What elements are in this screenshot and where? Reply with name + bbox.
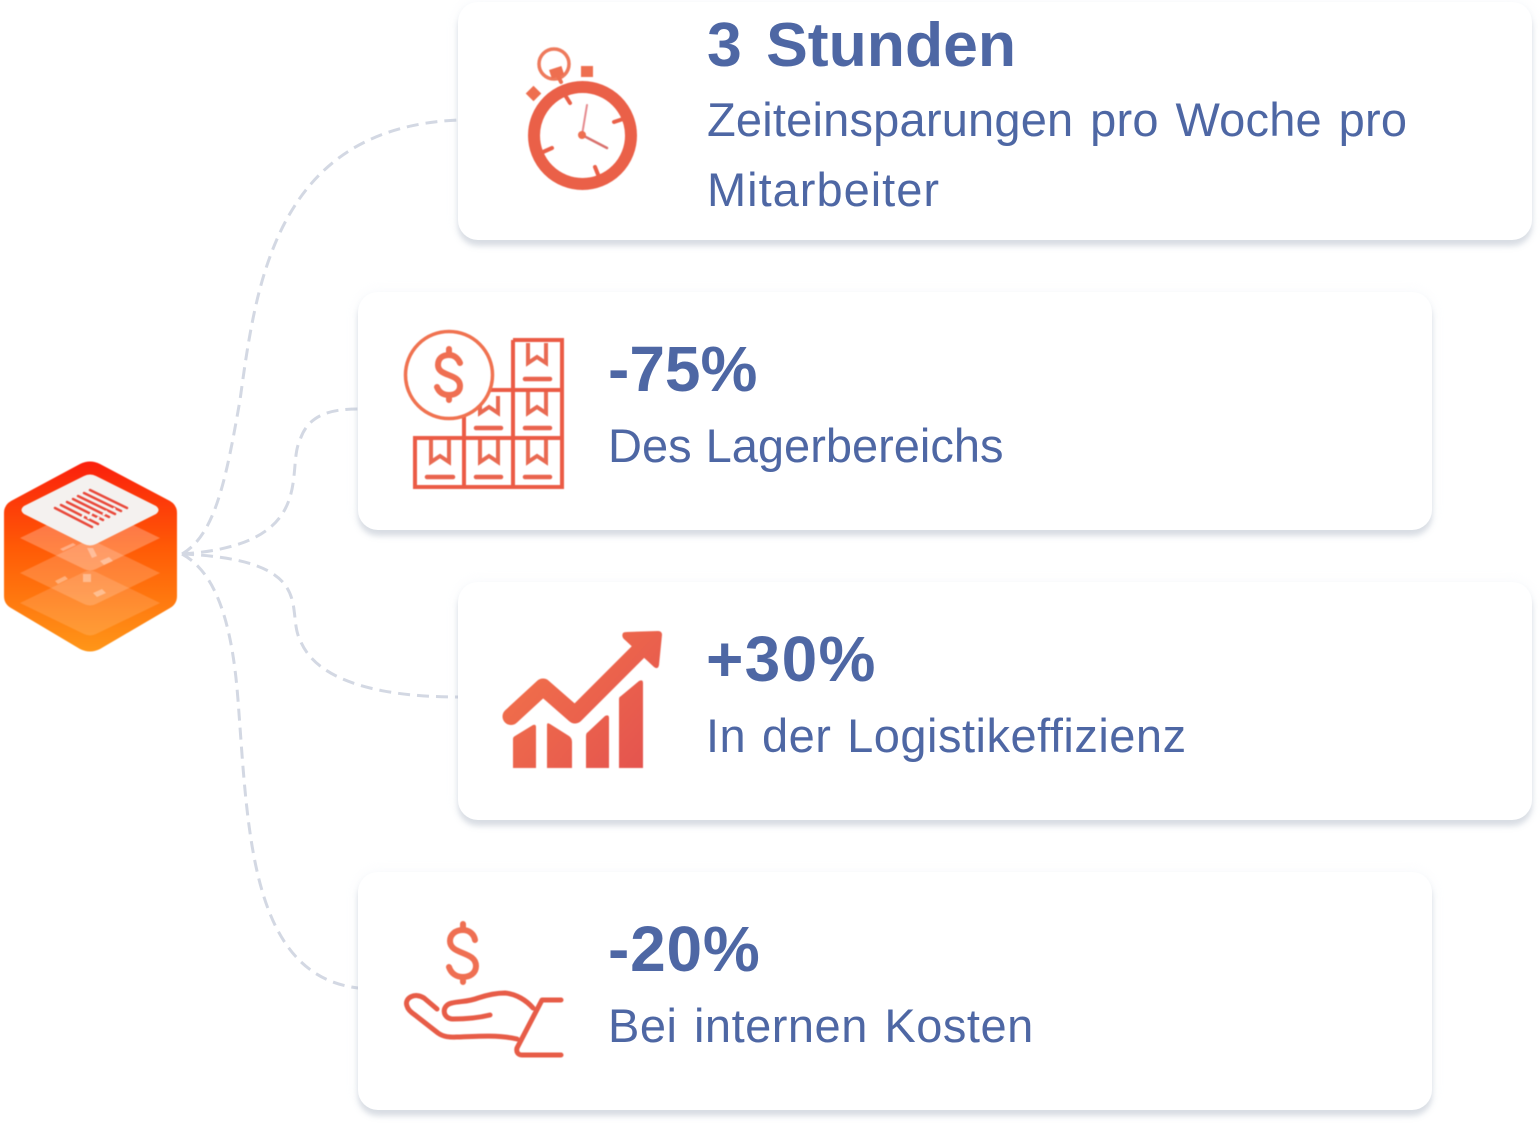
heading: -75% bbox=[608, 333, 757, 405]
card: 3 Stunden bbox=[458, 2, 1532, 240]
card: -20% bbox=[358, 872, 1432, 1110]
text: 3 Stunden bbox=[707, 10, 1407, 216]
heading: +30% bbox=[706, 623, 877, 695]
icon: hand with dollar bbox=[403, 920, 564, 1058]
heading: 3 Stunden bbox=[707, 10, 1016, 80]
description: Zeiteinsparungen pro Woche pro bbox=[707, 93, 1407, 146]
card: +30% bbox=[458, 582, 1532, 820]
text: -20% bbox=[608, 913, 1034, 1052]
dollar sign bbox=[437, 349, 460, 400]
text: -75% bbox=[608, 333, 1004, 472]
icon: boxes and dollar coin bbox=[403, 329, 565, 490]
icon: growth chart bbox=[502, 630, 663, 769]
description: In der Logistikeffizienz bbox=[706, 709, 1187, 762]
heading: -20% bbox=[608, 913, 761, 985]
icon: stopwatch bbox=[525, 46, 638, 191]
icon: layered orange hexagon cube bbox=[3, 460, 178, 652]
description: Bei internen Kosten bbox=[608, 999, 1034, 1052]
card: -75% bbox=[358, 292, 1432, 530]
description second line: Mitarbeiter bbox=[707, 163, 940, 216]
hand bbox=[406, 993, 561, 1055]
text: +30% bbox=[706, 623, 1187, 762]
description: Des Lagerbereichs bbox=[608, 419, 1004, 472]
dollar sign bbox=[449, 924, 476, 982]
